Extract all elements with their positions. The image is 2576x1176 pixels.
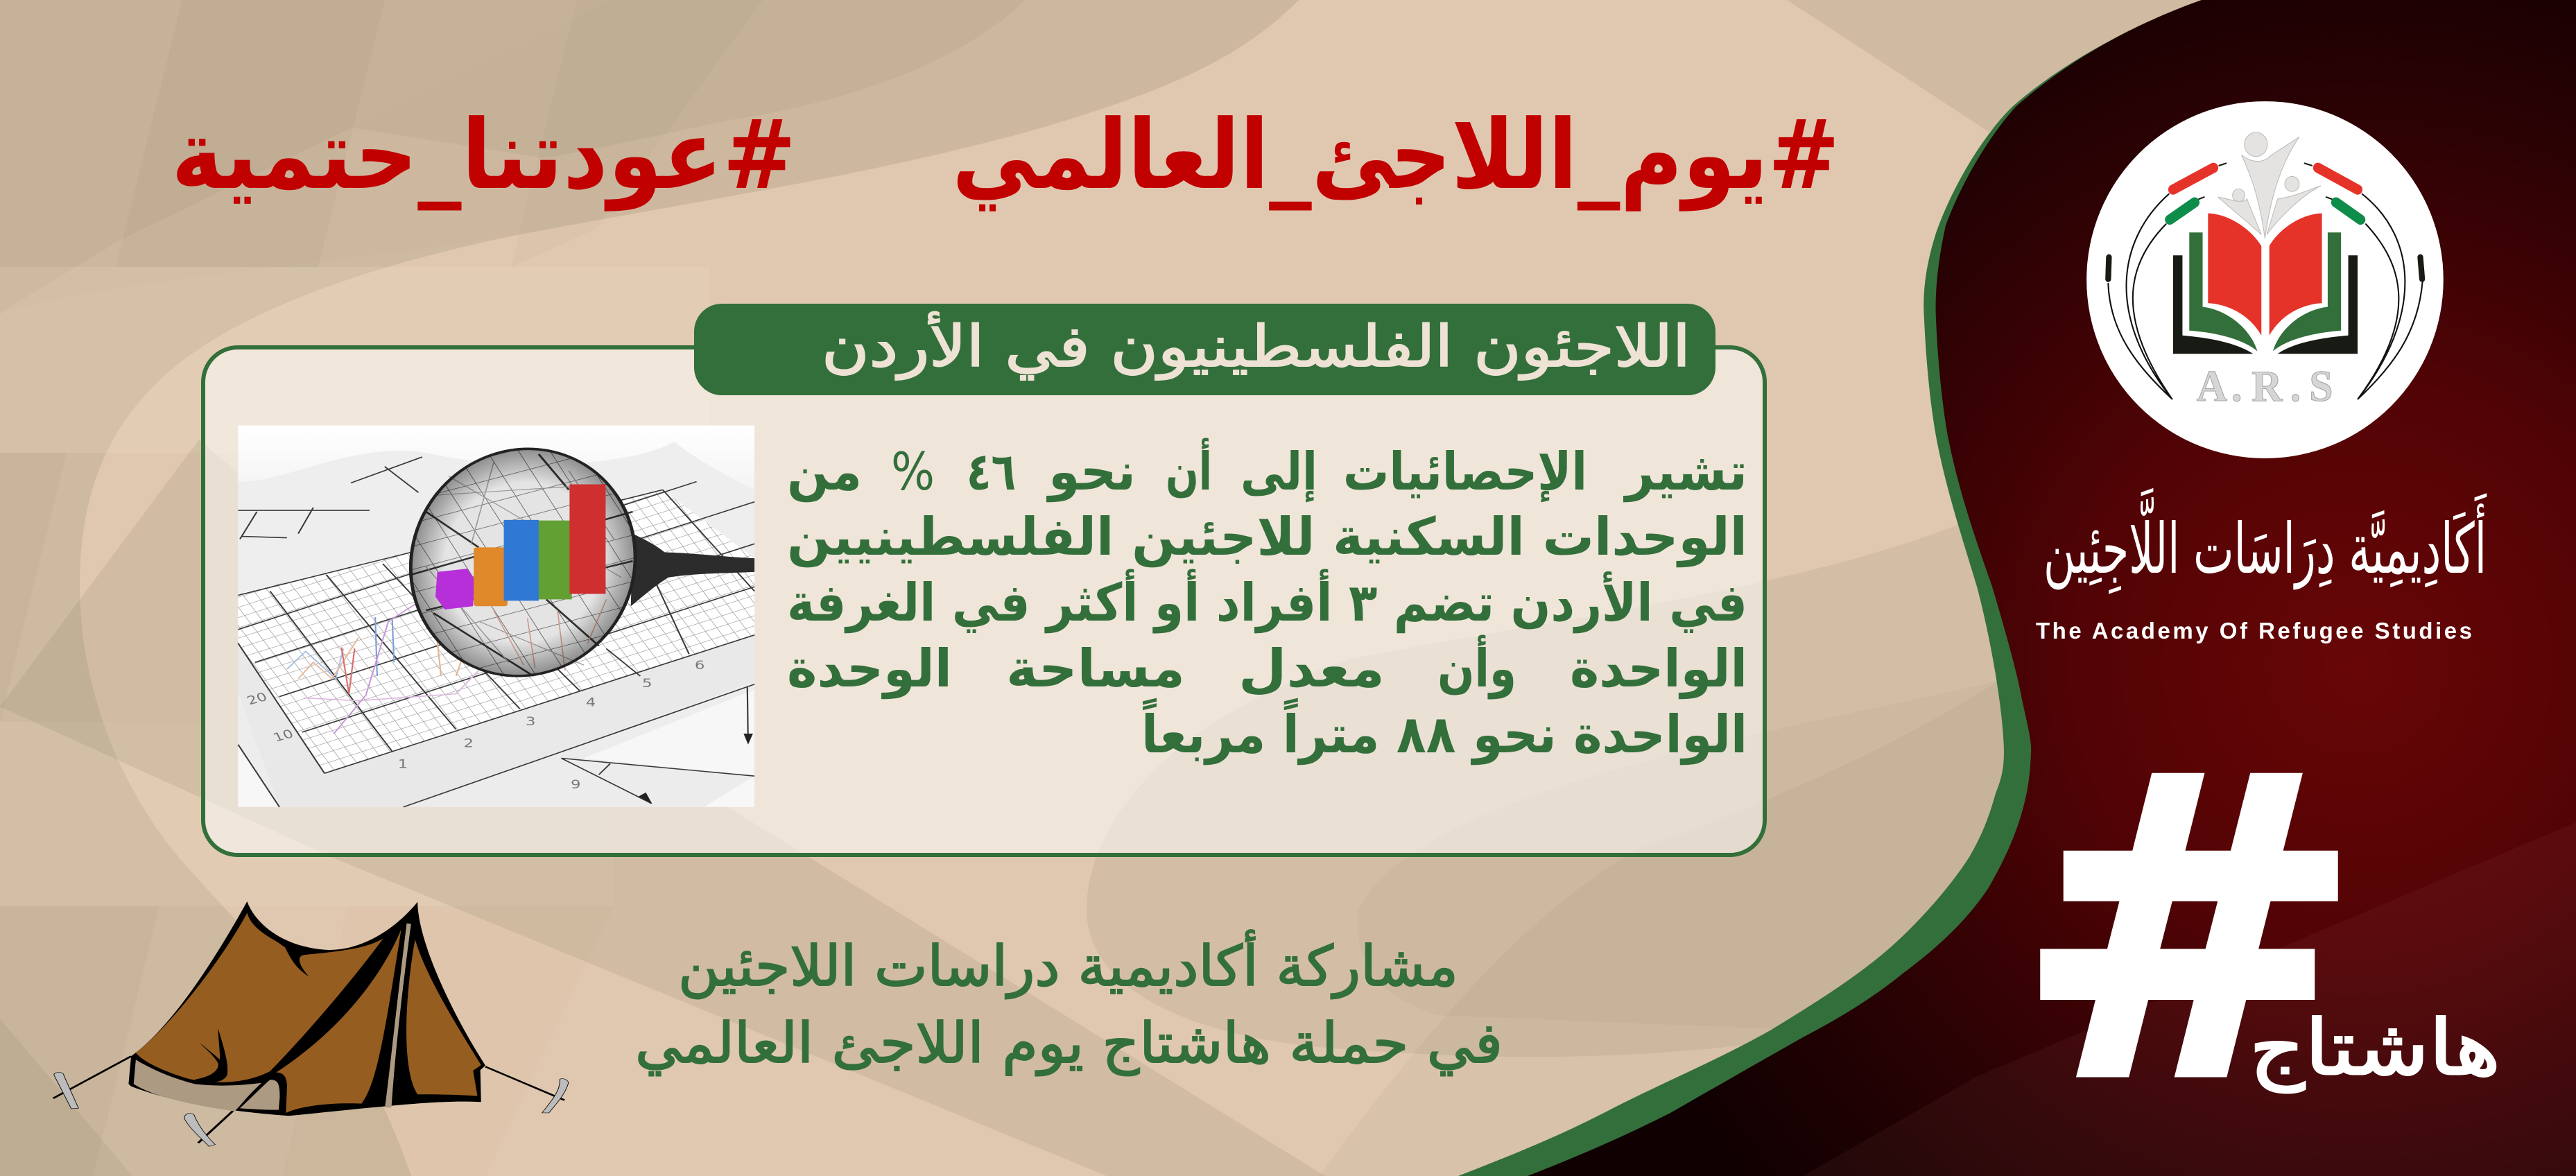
title: world refugee day hashtag: #يوم_اللاجئ_العالمي (952, 99, 1840, 211)
body text: الوحدة (787, 638, 952, 700)
image: magnifier over charts: 1 (398, 757, 408, 770)
body text: وأن (1437, 634, 1516, 700)
body text: ٤٦ (967, 441, 1016, 502)
tent pegs (54, 1072, 569, 1146)
magnifier handle (631, 534, 754, 606)
body text: معدل (1238, 638, 1385, 699)
image: magnifier over charts: 6 (695, 659, 704, 672)
footer text: academy participation (635, 930, 1503, 1076)
footer text: academy participation: مشاركة أكاديمية دراسات اللاجئين (678, 930, 1458, 999)
image: magnifier over charts: 10 (271, 727, 296, 745)
image: magnifier over charts: 3 (526, 715, 535, 728)
logo: A.R.S letters: . (2231, 361, 2242, 410)
green curved band (1458, 0, 2576, 1176)
heading pill (694, 304, 1715, 395)
heading pill: اللاجئون الفلسطينيون في الأردن (822, 312, 1691, 380)
body text: نحو (1046, 441, 1136, 503)
body text: % (891, 441, 935, 502)
logo: A.R.S letters: S (2309, 361, 2333, 410)
logo: A.R.S letters: R (2251, 361, 2283, 410)
bar chart in lens (435, 484, 605, 609)
logo: human figures (2218, 132, 2321, 239)
title: our return is inevitable hashtag: #عودتنا_حتمية (171, 99, 796, 211)
logo: A.R.S letters: A (2197, 361, 2227, 410)
logo: reeds (2108, 164, 2423, 399)
logo: academy emblem (2086, 101, 2444, 458)
image: magnifier over charts: 4 (586, 695, 596, 709)
footer text: academy participation: في حملة هاشتاج يوم اللاجئ العالمي (635, 1011, 1503, 1076)
panel: main content card (203, 347, 1765, 855)
body text: الواحدة نحو ٨٨ متراً مربعاً (1141, 698, 1747, 766)
dark panel lighter diagonal band (1803, 822, 2576, 1176)
body text: مساحة (1006, 638, 1185, 699)
logo: open book (2173, 214, 2358, 354)
magnifier lens (400, 443, 646, 682)
academy name in English: The Academy Of Refugee Studies (2036, 618, 2472, 643)
body text (787, 438, 1747, 766)
image: magnifier over charts: 20 (245, 690, 270, 707)
tent guy ropes (53, 1056, 564, 1143)
hashtag word: هاشتاج (2249, 1003, 2500, 1093)
body text: الإحصائيات (1343, 441, 1587, 503)
icon: tent (53, 901, 569, 1146)
large hashtag symbol: # (2016, 690, 2362, 1171)
dark red side panel (1528, 0, 2576, 1176)
image: magnifier over charts: 2 (464, 737, 474, 750)
body text: الواحدة (1570, 638, 1747, 700)
logo: A.R.S letters: . (2290, 361, 2301, 410)
body text: أن (1166, 438, 1212, 502)
body text: تشير (1623, 441, 1747, 503)
body text: إلى (1241, 441, 1317, 503)
image: magnifier over charts (238, 426, 754, 807)
body text: في الأردن تضم ٣ أفراد أو أكثر في الغرفة (787, 569, 1747, 634)
image: magnifier over charts: 5 (642, 677, 652, 690)
body text: من (787, 441, 862, 503)
image: magnifier over charts: 9 (571, 778, 581, 791)
body text: الوحدات السكنية للاجئين الفلسطينيين (787, 506, 1747, 568)
